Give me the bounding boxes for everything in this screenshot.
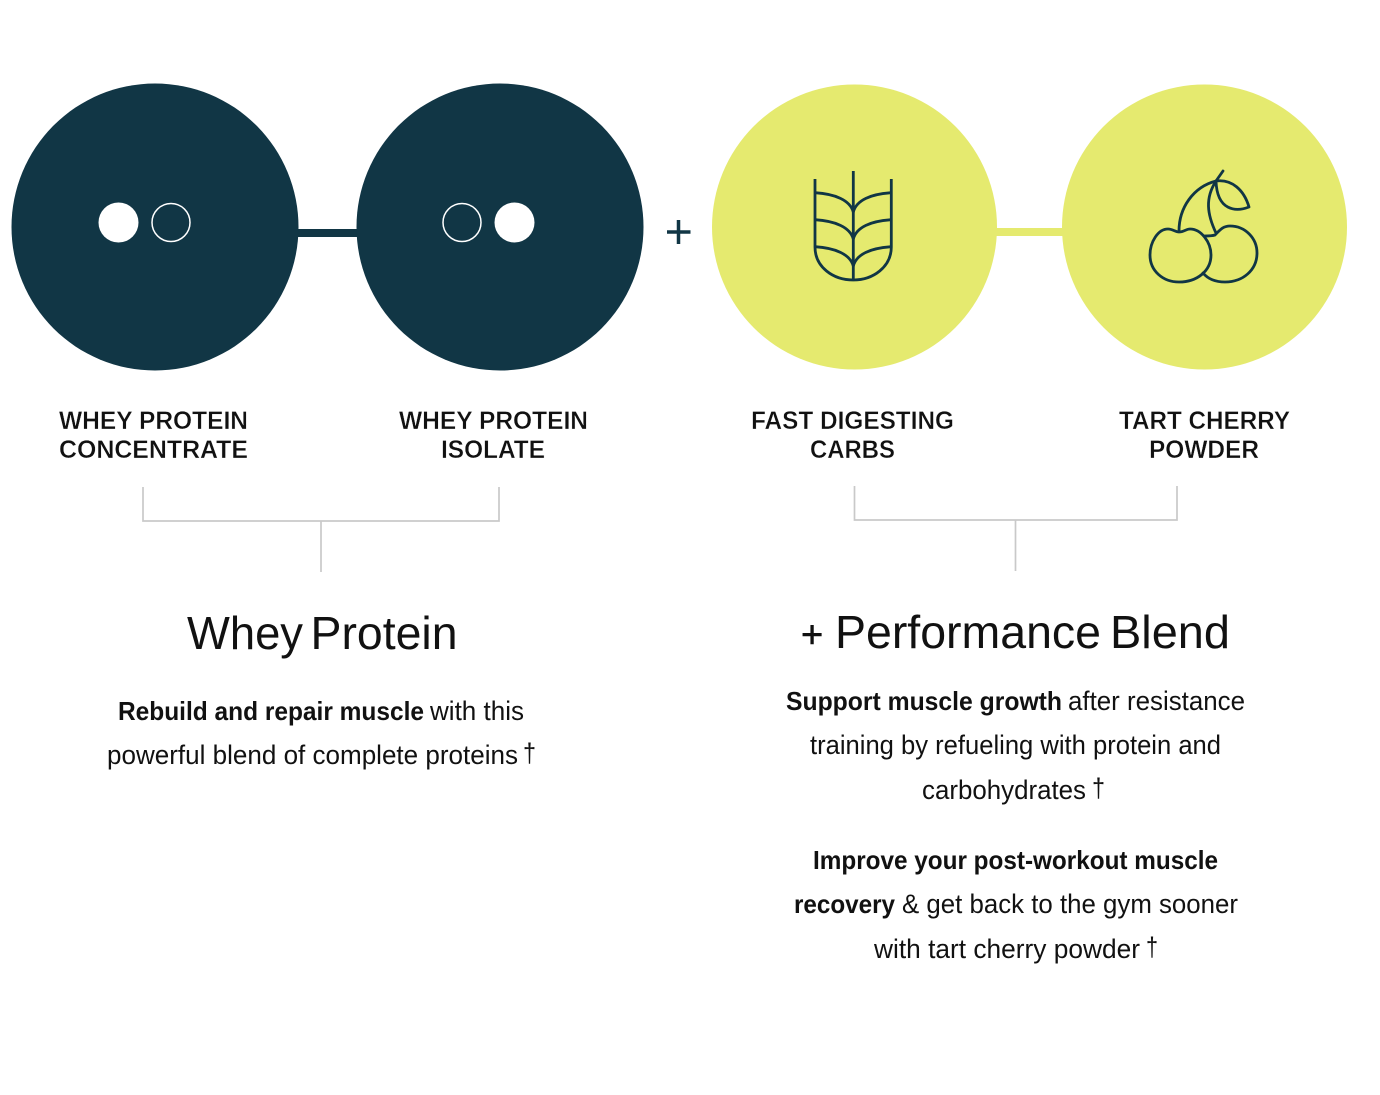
heading: performance blend: Performance — [835, 606, 1101, 658]
icon: wheat — [815, 171, 891, 281]
label: whey protein isolate — [399, 407, 588, 464]
text block: whey protein benefits: † — [523, 738, 536, 768]
label: whey protein isolate: ISOLATE — [441, 436, 545, 464]
heading: performance blend — [801, 606, 1230, 658]
label: whey protein concentrate — [59, 407, 248, 464]
icon: cherries — [1150, 171, 1257, 282]
bracket: whey protein — [143, 487, 499, 572]
text block: recovery benefit: Improve your post-workout muscle — [813, 845, 1218, 875]
text block: recovery benefit: recovery — [794, 889, 895, 919]
label: whey protein concentrate: WHEY PROTEIN — [59, 407, 248, 435]
label: fast digesting carbs — [751, 407, 954, 464]
label: whey protein concentrate: CONCENTRATE — [59, 436, 248, 464]
text block: muscle growth benefit: after resistance — [1068, 686, 1245, 716]
text block: recovery benefit: with tart cherry powder — [873, 934, 1140, 964]
heading: performance blend: + — [801, 614, 823, 656]
text block: recovery benefit: † — [1146, 932, 1158, 962]
label: tart cherry powder: TART CHERRY — [1119, 407, 1290, 435]
label: fast digesting carbs: FAST DIGESTING — [751, 407, 954, 435]
heading: whey protein: Protein — [310, 607, 458, 659]
text block: muscle growth benefit: carbohydrates — [922, 775, 1086, 805]
bracket: performance blend — [854, 486, 1177, 571]
text block: recovery benefit — [794, 845, 1238, 964]
text block: whey protein benefits: Rebuild and repair muscle — [118, 696, 424, 726]
label: fast digesting carbs: CARBS — [810, 436, 895, 464]
text block: whey protein benefits: with this — [429, 696, 524, 726]
text block: whey protein benefits: powerful blend of complete proteins — [107, 740, 518, 770]
heading: whey protein — [187, 607, 458, 659]
text block: muscle growth benefit: Support muscle growth — [786, 686, 1062, 716]
icon group: whey protein circles — [12, 84, 644, 370]
text block: whey protein benefits — [107, 696, 536, 770]
plus sign between groups — [667, 220, 690, 244]
label: tart cherry powder — [1119, 407, 1290, 464]
label: tart cherry powder: POWDER — [1149, 436, 1259, 464]
performance blend circles — [712, 84, 1347, 370]
text block: muscle growth benefit: training by refueling with protein and — [810, 730, 1221, 760]
text block: recovery benefit: & get back to the gym sooner — [902, 889, 1238, 919]
text block: muscle growth benefit — [786, 686, 1245, 805]
heading: performance blend: Blend — [1110, 606, 1230, 658]
heading: whey protein: Whey — [187, 607, 303, 659]
label: whey protein isolate: WHEY PROTEIN — [399, 407, 588, 435]
text block: muscle growth benefit: † — [1092, 773, 1105, 803]
